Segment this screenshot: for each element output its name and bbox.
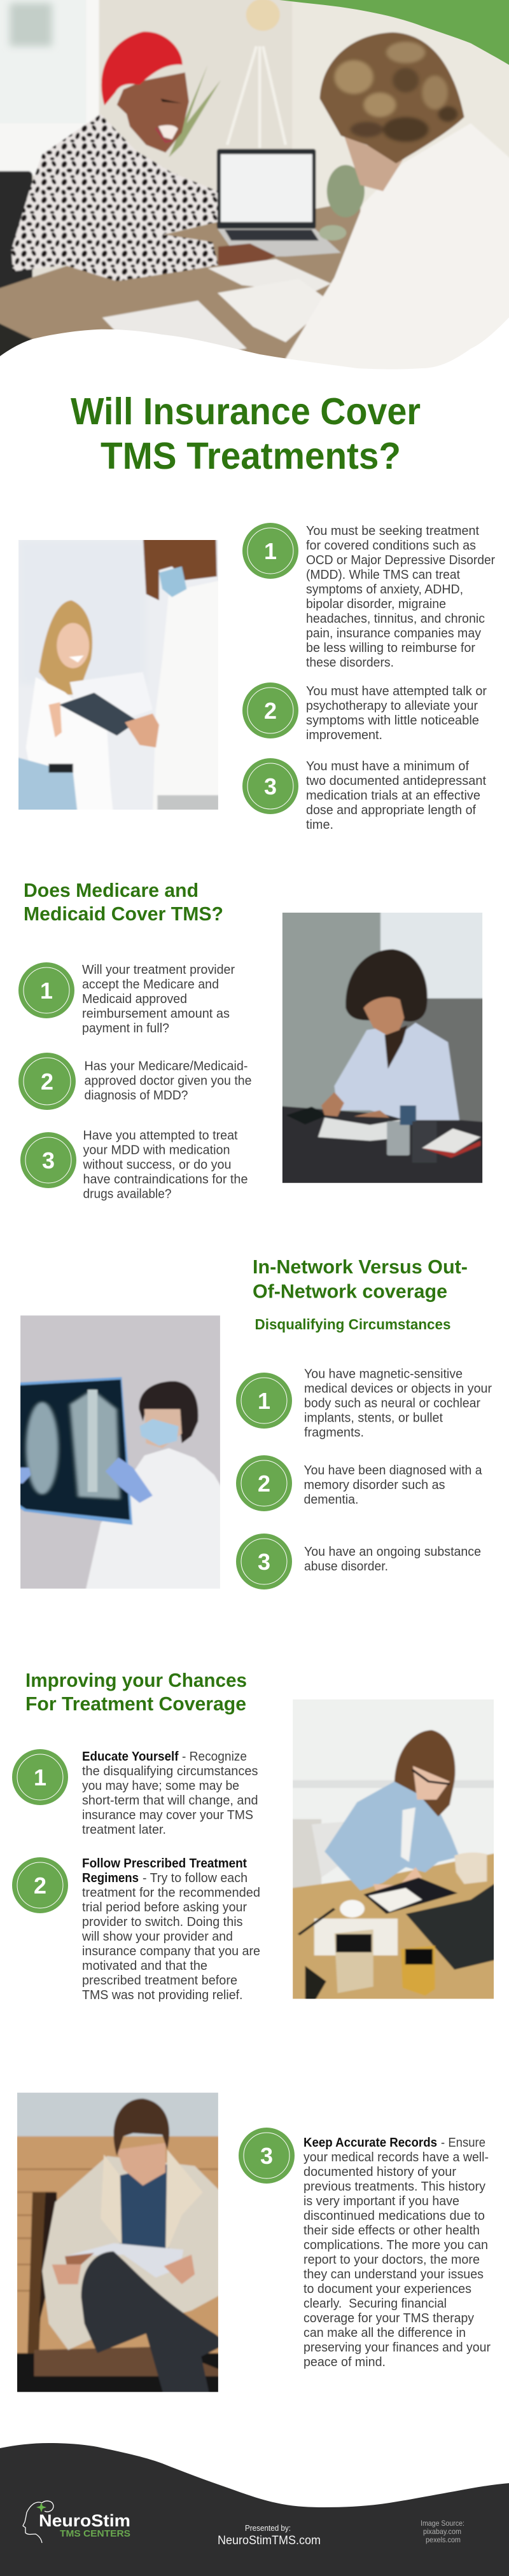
tip 3 text: report to your doctors, the more [303, 2253, 480, 2267]
heading: in-network versus out-of-network: In-Network Versus Out- [253, 1256, 468, 1278]
curly hair [345, 949, 428, 1021]
badge 2: 2 [41, 1069, 53, 1095]
badge 1 [242, 523, 298, 579]
item 2 text [304, 1464, 482, 1507]
phone [305, 1966, 326, 2007]
tip 1 text: short-term that will change, and [82, 1794, 258, 1808]
logo: NeuroStim TMS Centers [23, 2501, 130, 2543]
tip 2 text: will show your provider and [81, 1930, 233, 1944]
green corner shape [279, 0, 509, 65]
image sources: Image Source: [421, 2519, 464, 2528]
hero photo: two people at a desk [0, 0, 509, 392]
table [0, 205, 361, 359]
question 1 text: accept the Medicare and [82, 978, 219, 992]
item 2 text: psychotherapy to alleviate your [306, 699, 478, 713]
jeans [81, 2252, 228, 2402]
question 3 text: have contraindications for the [83, 1173, 248, 1187]
heading: in-network versus out-of-network [253, 1256, 468, 1303]
man's hair and mask [143, 532, 217, 600]
photo: doctor examining x-ray [20, 1315, 220, 1589]
question 1 text: Medicaid approved [82, 992, 187, 1006]
face [144, 1409, 182, 1448]
badge 1 [236, 1373, 292, 1429]
badge 1: 1 [40, 978, 53, 1004]
mug [454, 1853, 487, 1884]
item 1 text [306, 524, 495, 670]
tip 2 text: insurance company that you are [82, 1944, 260, 1958]
badge 1 [12, 1749, 68, 1805]
tip 2 text: TMS was not providing relief. [82, 1988, 243, 2002]
tip 2 text: Follow Prescribed Treatment [82, 1857, 247, 1871]
hands [373, 1867, 422, 1901]
heading: improving your chances: Improving your Chances [25, 1669, 247, 1691]
sweater [118, 2164, 169, 2253]
dark sweater [385, 1025, 407, 1069]
item 3 text: You must have a minimum of [306, 759, 469, 773]
man's shirt [153, 581, 218, 810]
badge 3 [20, 1132, 76, 1188]
hand and pen [321, 1092, 344, 1116]
tip 3 text: to document your experiences [303, 2282, 471, 2296]
badge 3: 3 [42, 1147, 55, 1174]
question 1 text [82, 963, 235, 1035]
list: requirements [242, 523, 495, 832]
item 3 text: abuse disorder. [304, 1560, 388, 1574]
tip 1 text: the disqualifying circumstances [82, 1764, 258, 1778]
tip 1 text: treatment later. [82, 1823, 166, 1837]
badge 2 [242, 682, 298, 738]
smile, eye and lips [158, 125, 178, 139]
item 3 text: time. [306, 818, 333, 832]
badge 3: 3 [264, 773, 277, 800]
tip 2 text [81, 1857, 260, 2002]
man's curly hair [320, 32, 464, 163]
lattice chair [283, 1819, 321, 1892]
hair [114, 2098, 169, 2156]
presented by: NeuroStimTMS.com [218, 2534, 321, 2547]
image sources [421, 2519, 464, 2544]
badge 1 [18, 962, 74, 1018]
item 1 text: for covered conditions such as [306, 539, 476, 553]
white coat [335, 1023, 459, 1120]
plant on table [327, 165, 365, 218]
item 1 text [304, 1368, 492, 1440]
tip 1 text: - Recognize [182, 1750, 247, 1764]
question 2 text [84, 1060, 252, 1103]
tip 2 text: treatment for the recommended [82, 1886, 260, 1900]
tip 3 text: previous treatments. This history [303, 2180, 485, 2194]
woman's face [117, 73, 189, 153]
photo: young man reading on a bench [8, 2083, 228, 2402]
blue gloves [106, 1457, 153, 1503]
mouse [340, 1900, 365, 1918]
logo tagline: TMS CENTERS [60, 2528, 130, 2539]
tip 3 text: discontinued medications due to [303, 2209, 485, 2223]
tip 3 text: peace of mind. [303, 2355, 386, 2369]
item 1 text: You must be seeking treatment [306, 524, 479, 538]
photo: man and woman reviewing clipboard [18, 540, 218, 810]
tip 3 text: can make all the difference in [303, 2326, 466, 2340]
item 2 text: You have been diagnosed with a [304, 1464, 482, 1478]
table [283, 1852, 503, 2007]
arm [125, 714, 159, 747]
tip 3 text: Keep Accurate Records [303, 2136, 437, 2150]
woman's leopard blouse [11, 114, 218, 281]
tip 1 text: you may have; some may be [82, 1779, 239, 1793]
item 1 text: these disorders. [306, 656, 394, 670]
item 2 text: improvement. [306, 728, 382, 742]
badge 1: 1 [264, 538, 277, 564]
item 2 text: You must have attempted talk or [306, 684, 487, 698]
open notebook [318, 1118, 409, 1140]
tip 3 text: preserving your finances and your [303, 2341, 491, 2355]
chair [0, 171, 32, 288]
tip 3 [239, 2128, 491, 2369]
hair [394, 1730, 456, 1817]
question 2 text: Has your Medicare/Medicaid- [84, 1060, 248, 1074]
white coat [85, 1448, 220, 1589]
calculator [286, 1107, 328, 1125]
tip 2 text: prescribed treatment before [82, 1974, 237, 1988]
item 1 text: medical devices or objects in your [304, 1381, 492, 1395]
photo: doctor writing at desk [282, 912, 482, 1183]
lamp and tripod [246, 0, 280, 31]
item 2 text: memory disorder such as [304, 1478, 445, 1492]
badge 2 [18, 1053, 76, 1110]
paper [69, 673, 145, 703]
plant behind woman [169, 65, 221, 157]
question 1 text: reimbursement amount as [82, 1007, 230, 1021]
presented by [218, 2523, 321, 2547]
badge 2 [236, 1455, 292, 1511]
item 3 text: medication trials at an effective [306, 789, 480, 803]
tip 3 text: clearly. Securing financial [303, 2297, 447, 2311]
badge 1: 1 [34, 1764, 46, 1790]
item 1 text: pain, insurance companies may [306, 627, 481, 641]
item 2 text: dementia. [304, 1493, 359, 1507]
question 2 text: approved doctor given you the [84, 1074, 252, 1088]
papers [208, 259, 331, 293]
item 3 text: two documented antidepressant [306, 774, 486, 788]
presented by: Presented by: [245, 2523, 291, 2533]
woman's white blouse [26, 677, 114, 817]
footer band [0, 2443, 509, 2576]
tip 3 text: documented history of your [303, 2165, 456, 2179]
glasses [412, 1769, 450, 1784]
list: Medicare questions [18, 962, 252, 1201]
badge 2: 2 [264, 698, 277, 724]
face [363, 997, 404, 1035]
woman's face [57, 623, 89, 668]
patterned box [335, 1930, 373, 1993]
question 2 text: diagnosis of MDD? [84, 1089, 188, 1103]
surgical mask [139, 1419, 179, 1446]
heading: Medicare and Medicaid: Medicaid Cover TMS? [24, 903, 223, 925]
item 2 text: symptoms with little noticeable [306, 714, 479, 728]
laptop [217, 149, 316, 229]
jeans [18, 757, 78, 810]
question 3 text: Have you attempted to treat [83, 1128, 238, 1142]
tip 3 text: they can understand your issues [303, 2268, 484, 2282]
badge 1: 1 [258, 1388, 270, 1414]
badge 3: 3 [258, 1549, 270, 1575]
item 1 text: fragments. [304, 1426, 364, 1440]
red hair [101, 32, 183, 106]
logo wordmark: NeuroStim [39, 2511, 130, 2530]
question 3 text [83, 1128, 248, 1201]
notebook [363, 1878, 457, 1914]
photo: woman writing at wooden table [283, 1692, 503, 2007]
denim shirt [324, 1782, 459, 1890]
tip 2 text: Regimens [82, 1871, 139, 1885]
question 3 text: drugs available? [83, 1187, 172, 1201]
badge 2 [12, 1857, 68, 1913]
desk [282, 1105, 482, 1183]
laptop [406, 1878, 503, 1970]
item 1 text: be less willing to reimburse for [306, 641, 475, 655]
heading: Medicare and Medicaid: Does Medicare and [24, 879, 199, 901]
list: tips 1 and 2 [12, 1749, 260, 2002]
item 1 text: body such as neural or cochlear [304, 1397, 480, 1411]
tip 3 text: - Ensure [441, 2136, 485, 2150]
watch [298, 1909, 335, 1935]
heading: Medicare and Medicaid [24, 879, 223, 925]
yellow box [401, 1946, 435, 1996]
question 1 text: payment in full? [82, 1021, 169, 1035]
item 3 text: You have an ongoing substance [304, 1545, 481, 1559]
item 3 text: dose and appropriate length of [306, 803, 476, 817]
man's white shirt [282, 123, 509, 392]
title: TMS Treatments? [101, 435, 401, 477]
tip 3 text: their side effects or other health [303, 2224, 480, 2238]
tip 3 text [303, 2136, 491, 2369]
heading: improving your chances [25, 1669, 247, 1715]
man's neck [344, 135, 403, 191]
badge 2: 2 [34, 1873, 46, 1899]
jacket [42, 2156, 228, 2350]
x-ray film [11, 1377, 132, 1525]
tip 3 text: is very important if you have [303, 2194, 459, 2208]
white book [314, 1918, 398, 1955]
item 1 text: You have magnetic-sensitive [304, 1368, 463, 1381]
logo head outline [23, 2502, 42, 2543]
face [413, 1766, 450, 1799]
badge 3 [239, 2128, 295, 2184]
question 1 text: Will your treatment provider [82, 963, 235, 977]
tip 1 text: Educate Yourself [82, 1750, 179, 1764]
fur collar [101, 2149, 203, 2255]
item 1 text: symptoms of anxiety, ADHD, [306, 583, 463, 597]
tip 1 text [82, 1750, 258, 1837]
item 1 text: (MDD). While TMS can treat [306, 568, 460, 582]
water glass [387, 1121, 410, 1155]
tip 3 text: coverage for your TMS therapy [303, 2311, 474, 2325]
bench frame [27, 2192, 45, 2353]
tip 3 text: your medical records have a well- [303, 2150, 489, 2164]
hair [139, 1381, 199, 1443]
tip 2 text: motivated and that the [82, 1959, 207, 1973]
title: Will Insurance Cover [71, 391, 421, 433]
item 1 text: implants, stents, or bullet [304, 1411, 443, 1425]
red and white book [422, 1128, 480, 1153]
subheading: disqualifying circumstances: Disqualifying Circumstances [254, 1316, 450, 1333]
woman's hand [218, 244, 276, 267]
logo star [36, 2502, 46, 2512]
woman's hair [39, 600, 92, 695]
tip 1 text: insurance may cover your TMS [82, 1808, 253, 1822]
face and neck [117, 2143, 165, 2185]
item 3 text [304, 1545, 481, 1574]
item 1 text: OCD or Major Depressive Disorder [306, 553, 495, 567]
heading: in-network versus out-of-network: Of-Network coverage [253, 1280, 447, 1303]
item 1 text: headaches, tinnitus, and chronic [306, 612, 485, 626]
badge 3 [236, 1534, 292, 1589]
question 3 text: without success, or do you [83, 1158, 232, 1172]
tip 3 text: complications. The more you can [303, 2238, 488, 2252]
badge 2: 2 [258, 1471, 270, 1497]
drink can and pen holder [400, 1105, 416, 1125]
image sources: pixabay.com [423, 2527, 461, 2536]
tip 2 text: provider to switch. Doing this [82, 1915, 243, 1929]
tip 2 text: - Try to follow each [143, 1871, 248, 1885]
image sources: pexels.com [426, 2535, 461, 2544]
hands [52, 2264, 81, 2284]
question 3 text: your MDD with medication [83, 1144, 230, 1158]
item 2 text [306, 684, 487, 742]
papers [65, 2243, 183, 2278]
list: disqualifying circumstances [236, 1368, 492, 1589]
badge 3: 3 [260, 2143, 273, 2169]
item 1 text: bipolar disorder, migraine [306, 597, 446, 611]
tip 2 text: trial period before asking your [82, 1901, 247, 1915]
badge 3 [242, 758, 298, 814]
item 3 text [306, 759, 486, 832]
clipboard [59, 693, 138, 736]
title [71, 391, 421, 477]
heading: improving your chances: For Treatment Coverage [25, 1693, 246, 1715]
